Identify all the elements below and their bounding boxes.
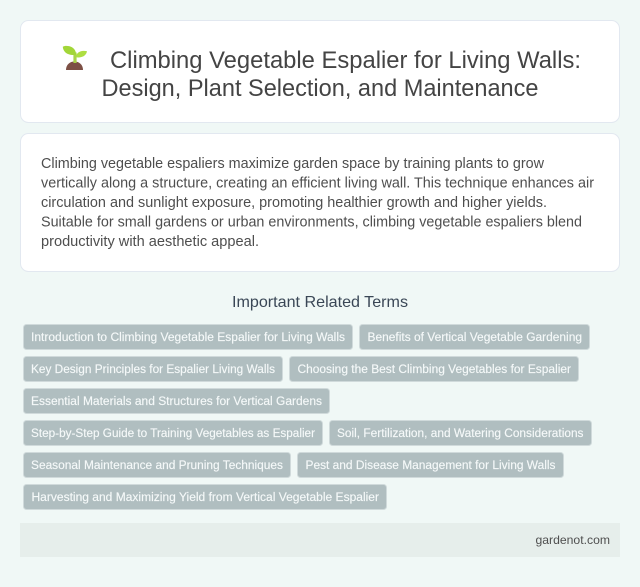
footer xyxy=(20,523,620,557)
description text: vertically along a structure, creating an efficient living wall. This technique enhances air xyxy=(41,174,594,192)
tag: choosing vegetables: Choosing the Best Climbing Vegetables for Espalier xyxy=(298,362,571,376)
title text: Design, Plant Selection, and Maintenance xyxy=(102,75,538,102)
tag: step-by-step xyxy=(24,420,322,446)
tag: seasonal maintenance xyxy=(24,452,290,478)
tag: introduction xyxy=(24,324,352,350)
description text: Suitable for small gardens or urban environments, climbing vegetable espaliers blend xyxy=(41,214,582,230)
tag: essential materials xyxy=(24,388,330,414)
tag: benefits: Benefits of Vertical Vegetable Gardening xyxy=(368,330,582,344)
icon: sprout xyxy=(63,46,87,70)
tag: introduction: Introduction to Climbing Vegetable Espalier for Living Walls xyxy=(31,330,345,344)
panel: title card xyxy=(20,20,620,122)
tag: key design principles xyxy=(24,356,282,382)
description text: productivity with aesthetic appeal. xyxy=(41,233,259,250)
tag: benefits xyxy=(360,324,590,350)
tag: step-by-step: Step-by-Step Guide to Training Vegetables as Espalier xyxy=(31,426,315,440)
tag: harvesting: Harvesting and Maximizing Yield from Vertical Vegetable Espalier xyxy=(32,490,379,504)
tag: soil: Soil, Fertilization, and Watering Considerations xyxy=(337,426,584,440)
tag list xyxy=(24,324,592,510)
title text: Climbing Vegetable Espalier for Living Walls: xyxy=(110,47,581,74)
panel: description card xyxy=(20,134,620,272)
heading: important related terms: Important Related Terms xyxy=(232,294,408,311)
tag: key design principles: Key Design Principles for Espalier Living Walls xyxy=(31,362,275,376)
tag: seasonal maintenance: Seasonal Maintenance and Pruning Techniques xyxy=(31,458,283,472)
tag: pest and disease: Pest and Disease Management for Living Walls xyxy=(306,458,556,472)
tag: soil xyxy=(330,420,592,446)
tag: essential materials: Essential Materials and Structures for Vertical Gardens xyxy=(31,394,322,408)
tag: harvesting xyxy=(24,484,386,510)
tag: choosing vegetables xyxy=(290,356,578,382)
description text: Climbing vegetable espaliers maximize garden space by training plants to grow xyxy=(41,155,544,172)
tag: pest and disease xyxy=(298,452,564,478)
footer text: gardenot.com xyxy=(536,533,610,547)
description text: circulation and sunlight exposure, promoting healthier growth and higher yields. xyxy=(41,194,547,211)
